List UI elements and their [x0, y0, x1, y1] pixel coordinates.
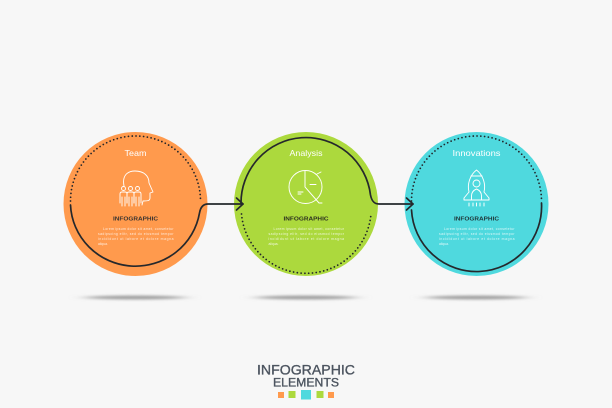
label: infographic: INFOGRAPHIC — [284, 217, 329, 223]
icon: rocket — [464, 170, 489, 206]
body text — [439, 227, 515, 246]
panel: team — [64, 132, 208, 276]
heading: innovations: Innovations — [452, 148, 500, 158]
body text: Lorem ipsum dolor sit amet, consetetur — [274, 227, 345, 231]
body text — [268, 227, 345, 246]
dotted lower arc — [242, 214, 371, 273]
body text: Lorem ipsum dolor sit amet, consetetur — [103, 227, 174, 231]
panel: innovations — [404, 132, 548, 276]
label: infographic: INFOGRAPHIC — [113, 217, 158, 223]
body text: aliqua. — [268, 242, 279, 246]
body text: sadipscing elitr, sed do eiusmod tempor — [268, 232, 345, 236]
dotted upper arc — [412, 136, 542, 201]
icon: team — [120, 171, 153, 206]
title: ELEMENTS — [273, 378, 339, 390]
title — [257, 362, 355, 390]
heading: team: Team — [124, 148, 146, 158]
dotted upper arc — [70, 136, 200, 201]
body text: sadipscing elitr, sed do eiusmod tempor — [98, 232, 174, 236]
body text: Lorem ipsum dolor sit amet, consetetur — [444, 227, 515, 231]
body text: sadipscing elitr, sed do eiusmod tempor — [439, 232, 515, 236]
heading: analysis: Analysis — [290, 148, 322, 158]
shadow: innovations — [426, 296, 526, 300]
shadow: analysis — [256, 296, 356, 300]
title: INFOGRAPHIC — [257, 362, 355, 378]
body text — [98, 227, 174, 246]
icon: pie chart — [289, 170, 322, 204]
body text: aliqua. — [439, 242, 449, 246]
body text: incididunt ut labore et dolore magna — [439, 237, 515, 241]
body text: incididunt ut labore et dolore magna — [98, 237, 174, 241]
arrow: team to analysis — [70, 198, 243, 266]
body text: aliqua. — [98, 242, 108, 246]
label: infographic: INFOGRAPHIC — [454, 217, 499, 223]
body text: incididunt ut labore et dolore magna — [268, 237, 344, 241]
legend squares — [278, 390, 334, 400]
arc: innovations lower — [412, 203, 542, 272]
shadow: team — [85, 296, 185, 300]
arrow: analysis to innovations — [241, 138, 413, 210]
panel: analysis — [234, 132, 378, 276]
